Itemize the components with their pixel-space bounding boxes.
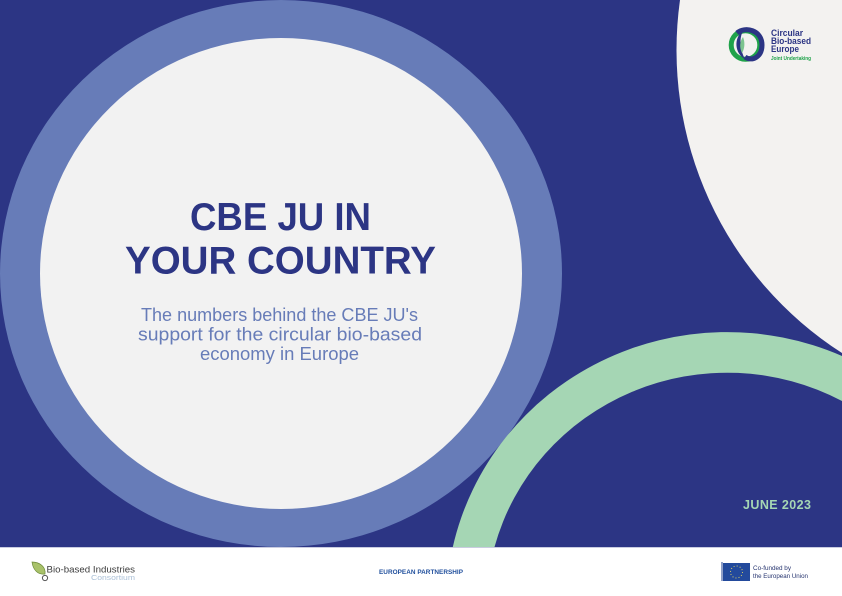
logo tagline: Joint Undertaking <box>771 56 811 62</box>
logo wordmark: Europe <box>771 44 799 54</box>
subtitle <box>138 305 422 364</box>
partner logo: Bio-based Industries Consortium: Bio-based Industries <box>46 564 135 576</box>
subtitle: support for the circular bio-based <box>138 324 422 344</box>
subtitle: The numbers behind the CBE JU's <box>141 305 418 325</box>
top-right pale circle <box>677 0 842 353</box>
co-funded text <box>753 565 808 580</box>
logo: Circular Bio-based Europe <box>731 28 811 62</box>
logo mark <box>731 30 762 59</box>
logo wordmark: Circular <box>771 28 803 38</box>
icon: leaf <box>32 562 48 581</box>
title <box>125 196 436 282</box>
green ring <box>453 332 842 547</box>
partner logo: Bio-based Industries Consortium: Consortium <box>91 575 135 582</box>
footer band <box>0 547 842 596</box>
date: JUNE 2023 <box>743 498 811 512</box>
logo wordmark: Bio-based <box>771 36 811 46</box>
large title circle with ring <box>0 0 562 547</box>
logo wordmark <box>771 28 811 54</box>
co-funded text: Co-funded by <box>753 565 792 572</box>
icon: EU flag <box>723 563 750 581</box>
subtitle: economy in Europe <box>200 344 359 364</box>
co-funded text: the European Union <box>753 573 808 580</box>
title: CBE JU IN <box>190 196 371 239</box>
EU co-funded logo <box>722 562 808 581</box>
European partnership label: EUROPEAN PARTNERSHIP <box>379 569 464 576</box>
title: YOUR COUNTRY <box>125 240 436 282</box>
partner logo: Bio-based Industries Consortium <box>32 562 135 582</box>
